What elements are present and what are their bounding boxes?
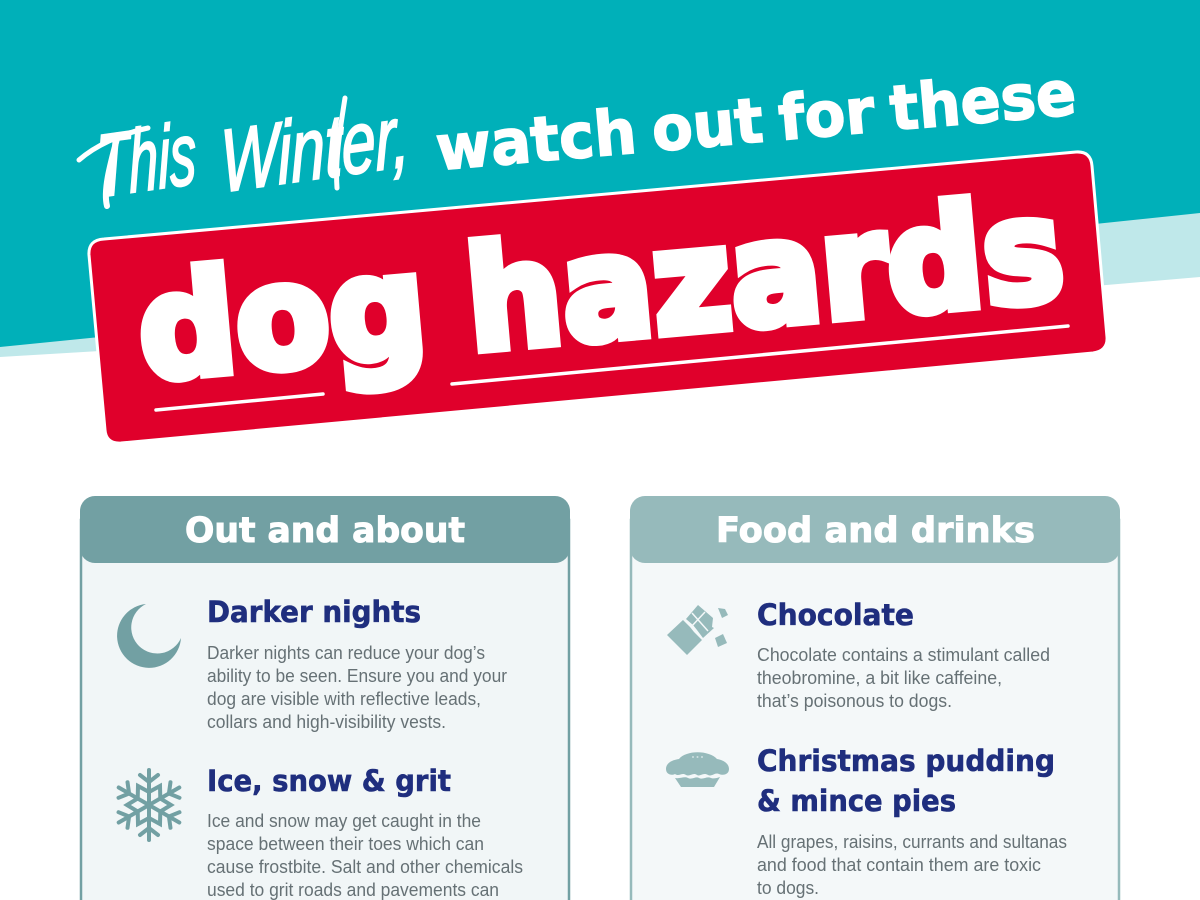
text: darker nights: ability to be seen. Ensure you and your xyxy=(207,666,507,686)
heading: christmas pudding and mince pies xyxy=(757,744,1055,818)
icon: snowflake xyxy=(119,770,179,840)
text: christmas pudding xyxy=(757,832,1067,898)
icon: moon xyxy=(117,604,181,668)
title: this winter xyxy=(79,85,411,216)
panel body xyxy=(81,520,569,900)
text: darker nights: Darker nights can reduce your dog’s xyxy=(207,643,485,663)
text: christmas pudding: All grapes, raisins, currants and sultanas xyxy=(757,832,1067,852)
title: watch out for these: watch out for these xyxy=(433,56,1079,185)
icon: pie xyxy=(666,752,729,787)
heading: chocolate: Chocolate xyxy=(757,598,914,632)
T crossbar swoosh xyxy=(79,128,148,160)
heading: christmas pudding and mince pies: Christmas pudding xyxy=(757,744,1055,778)
heading: darker nights: Darker nights xyxy=(207,595,421,629)
text: chocolate: that’s poisonous to dogs. xyxy=(757,691,952,711)
heading: christmas pudding and mince pies: & mince pies xyxy=(757,784,956,818)
red banner xyxy=(89,152,1107,443)
header background: teal xyxy=(0,0,1200,347)
text: christmas pudding: to dogs. xyxy=(757,878,819,898)
panel header bar xyxy=(80,496,570,563)
tall t stem xyxy=(337,98,345,188)
underline: dog xyxy=(156,394,323,410)
header background: pale band xyxy=(0,213,1200,357)
panel heading: Food and drinks xyxy=(716,511,1035,551)
text: chocolate xyxy=(757,645,1050,711)
panel: out and about xyxy=(80,496,570,900)
panel header bar xyxy=(630,496,1120,563)
panel heading: Out and about xyxy=(185,511,465,551)
text: ice snow grit: space between their toes which can xyxy=(207,834,484,854)
text: ice snow grit: used to grit roads and pavements can xyxy=(207,880,499,900)
text: ice snow grit xyxy=(207,811,523,900)
heading: ice snow grit: Ice, snow & grit xyxy=(207,764,451,798)
banner shape xyxy=(89,152,1107,443)
T stem swoosh xyxy=(106,135,118,206)
text: darker nights: dog are visible with reflective leads, xyxy=(207,689,481,709)
text: ice snow grit: cause frostbite. Salt and other chemicals xyxy=(207,857,523,877)
icon: chocolate xyxy=(667,605,728,655)
text: christmas pudding: and food that contain them are toxic xyxy=(757,855,1041,875)
banner word: dog: dog xyxy=(132,223,433,413)
underline: hazards xyxy=(452,326,1068,384)
text: darker nights xyxy=(207,643,507,732)
text: darker nights: collars and high-visibility vests. xyxy=(207,712,446,732)
script word: this: This xyxy=(95,103,198,216)
text: chocolate: Chocolate contains a stimulant called xyxy=(757,645,1050,665)
panel: food and drinks xyxy=(630,496,1120,900)
banner word: hazards: hazards xyxy=(460,167,1070,384)
text: ice snow grit: Ice and snow may get caught in the xyxy=(207,811,481,831)
script word: winter: Winter, xyxy=(219,85,411,211)
text: chocolate: theobromine, a bit like caffeine, xyxy=(757,668,1002,688)
panel body xyxy=(631,520,1119,900)
